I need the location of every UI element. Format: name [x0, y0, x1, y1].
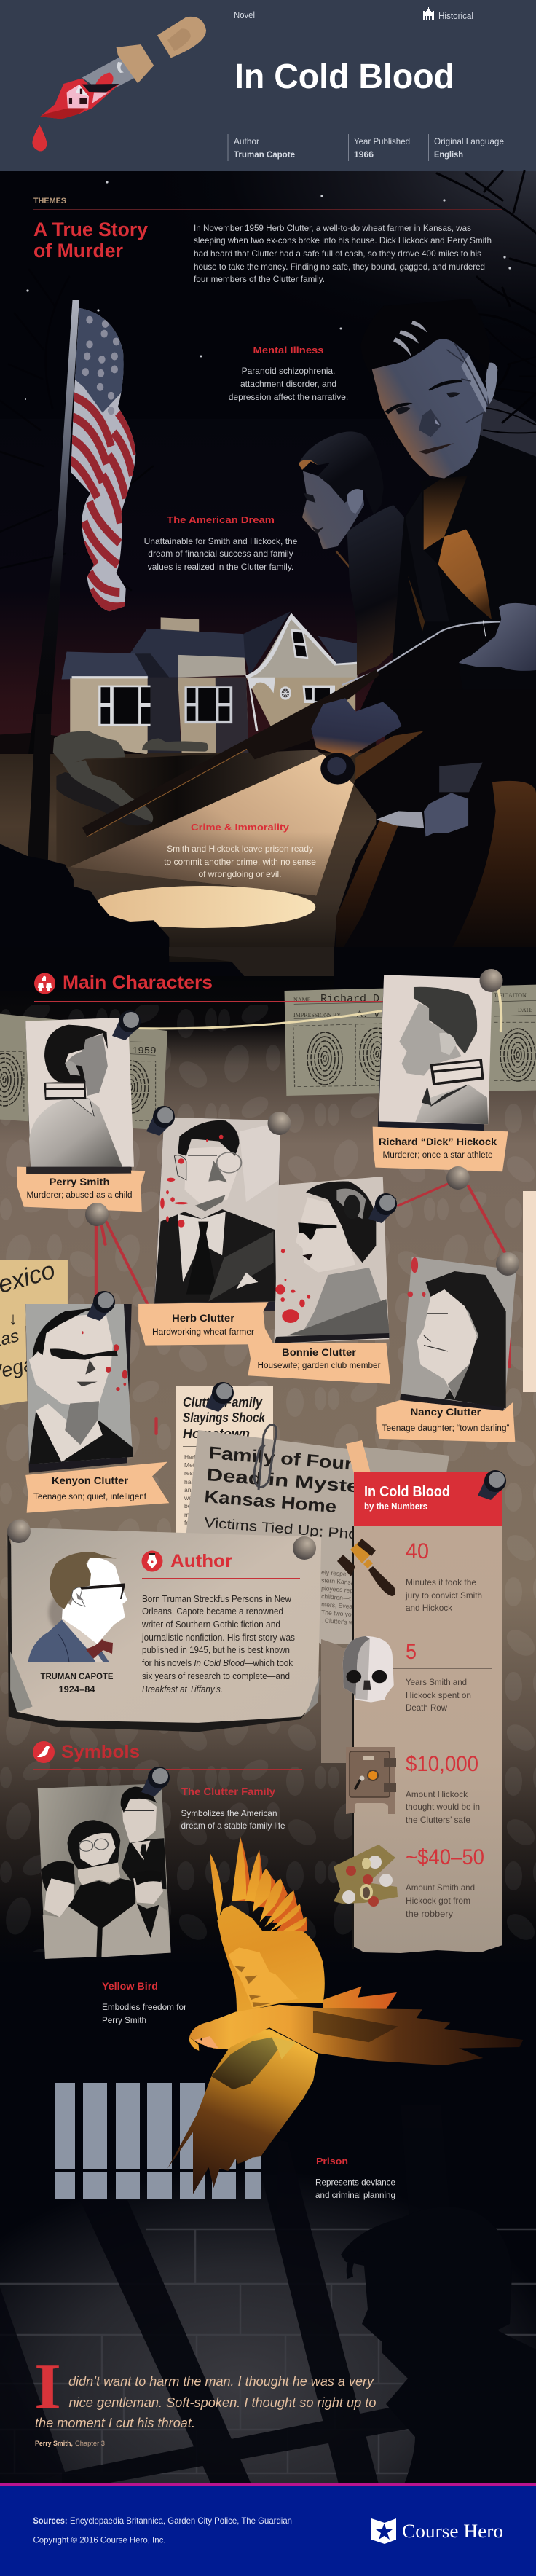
author biography: for his novels In Cold Blood—which took: [142, 1658, 293, 1668]
icon: dove: [33, 1741, 55, 1763]
foreground rock: [0, 844, 169, 962]
theme: crime and immorality: Smith and Hickock leave prison ready: [167, 844, 313, 854]
man front: face: [372, 339, 488, 479]
fingerprint cards: A. V.: [357, 1009, 385, 1020]
newspaper: family of four shot: [186, 1425, 449, 1763]
window shadow: [0, 2105, 473, 2484]
stat: 10000: the Clutters’ safe: [406, 1815, 470, 1825]
note: handwritten mexico: ↓: [9, 1309, 17, 1329]
newspaper: clutter family slayings: Herb: [184, 1453, 198, 1461]
ground bit below rock: [169, 947, 334, 978]
theme: american dream: values is realized in the Clutter family.: [148, 562, 293, 572]
label: richard hickock: [373, 1127, 508, 1171]
daughter: [43, 1907, 98, 1959]
panel: by the numbers: by the Numbers: [364, 1501, 427, 1512]
title: In Cold Blood: [234, 58, 454, 96]
stat: 10000: Amount Hickock: [406, 1789, 468, 1799]
theme: crime and immorality: [164, 822, 316, 879]
stat: 5: [393, 1640, 492, 1713]
icon: castle: [423, 7, 434, 20]
symbol: prison: Represents deviance: [315, 2177, 395, 2187]
icon: paperclip: [254, 1425, 277, 1490]
newspaper: family of four shot: Dead in Mystery: [206, 1465, 382, 1499]
newspaper: clutter family slayings: for: [184, 1519, 192, 1526]
right hand: [459, 603, 536, 671]
stat: 40: jury to convict Smith: [405, 1590, 482, 1601]
silhouette: perry smith: [341, 2207, 536, 2484]
symbol: yellow bird: [102, 1980, 186, 2025]
fingerprint cards: [0, 985, 536, 1131]
fingerprint cards: NAME: [293, 997, 311, 1003]
stat: 10000: thought would be in: [406, 1802, 480, 1812]
panel: themes night scene: [0, 171, 536, 1009]
theme heading: A True Story: [34, 219, 148, 240]
newspaper: clutter family slayings: Hometown: [183, 1426, 250, 1441]
newspaper: family of four shot: stern Kansas: [321, 1576, 358, 1586]
newspaper: family of four shot: children—t: [321, 1593, 352, 1602]
newspaper: clutter family slayings: mad: [184, 1511, 197, 1518]
theme: american dream: Unattainable for Smith and Hickock, the: [144, 536, 298, 546]
logo: [371, 2518, 503, 2544]
newspaper: clutter family slayings: and: [184, 1486, 194, 1493]
theme: american dream: [144, 514, 298, 572]
illustration: yard and flashlight beam: [0, 714, 376, 962]
meta: language: Original Language: [434, 136, 504, 146]
newspaper: family of four shot: nters, Evean: [321, 1601, 356, 1610]
tape: [346, 1440, 372, 1482]
newspaper: clutter family slayings: were: [184, 1494, 198, 1501]
theme summary: [194, 223, 492, 284]
stat: 5: Years Smith and: [406, 1677, 467, 1687]
footer: Encyclopaedia Britannica, Garden City Police, The Guardian: [70, 2516, 292, 2526]
label: nancy clutter: [376, 1400, 515, 1442]
author biography: six years of research to complete—and: [142, 1671, 290, 1681]
stat: 40-50: [393, 1845, 492, 1919]
wing coverts: [217, 1905, 325, 2012]
author caption: TRUMAN CAPOTE: [41, 1671, 114, 1681]
author biography: writer of Southern Gothic fiction and: [141, 1619, 280, 1630]
heading: symbols: Symbols: [61, 1742, 140, 1762]
meta: language: English: [434, 149, 463, 160]
symbol: clutter family: dream of a stable family life: [181, 1821, 285, 1831]
photo: richard hickock: [378, 975, 492, 1131]
stat: 40-50: ~$40–50: [406, 1845, 484, 1869]
newspaper: family of four shot: Kansas Home: [204, 1487, 337, 1517]
fingerprint cards: Richard D: [320, 993, 379, 1005]
symbol: clutter family: Symbolizes the American: [181, 1808, 277, 1818]
stars: [25, 181, 511, 400]
theme summary: four members of the Clutter family.: [194, 274, 325, 284]
lower wing: [168, 2029, 318, 2194]
head: [189, 2038, 199, 2051]
symbol: clutter family: The Clutter Family: [181, 1786, 275, 1797]
label: perry smith: Murderer; abused as a child: [26, 1191, 133, 1200]
mother: [67, 1820, 120, 1870]
photo: bonnie clutter: [274, 1177, 390, 1343]
theme: mental illness: Mental Illness: [253, 345, 323, 356]
genre label: Novel: [234, 9, 255, 20]
quote: didn’t want to harm the man. I thought he was a very: [68, 2374, 374, 2389]
label: kenyon clutter: [25, 1462, 169, 1513]
meta: author: Author: [234, 136, 259, 146]
panel: author card: [7, 1528, 321, 1732]
house: [61, 611, 359, 756]
meta: year: [348, 134, 410, 161]
fingerprint cards: IMPRESSIONS BY: [293, 1012, 341, 1018]
author biography: Orleans, Capote became a renowned: [142, 1606, 283, 1617]
theme: mental illness: [229, 345, 348, 402]
quote: [34, 2352, 376, 2448]
newspaper: family of four shot: Victims Tied Up; Photo: [204, 1515, 372, 1544]
newspaper: clutter family slayings: Meth: [184, 1461, 198, 1469]
newspaper: family of four shot: ely respe: [321, 1568, 347, 1577]
author biography: published in 1945, but he is best known: [142, 1645, 290, 1655]
upper tail: [323, 1987, 397, 2011]
son: [101, 1903, 171, 1957]
label: perry smith: [17, 1167, 145, 1212]
heading: main characters: Main Characters: [63, 973, 213, 993]
newspaper: clutter family slayings: resp: [184, 1469, 197, 1477]
gray shoulder backdrop: [466, 393, 536, 466]
beam of flashlight: [70, 754, 354, 895]
label: bonnie clutter: Bonnie Clutter: [282, 1346, 357, 1358]
prison window: [55, 2083, 261, 2199]
heading: main characters: [34, 973, 384, 1002]
theme: crime and immorality: to commit another crime, with no sense: [164, 857, 316, 867]
illustration: flag and house: [0, 300, 376, 770]
left hand: [311, 698, 402, 758]
legs: [334, 690, 536, 962]
note: handwritten mexico: [0, 1256, 68, 1405]
horizon hills: [0, 733, 376, 770]
photo: perry smith: [25, 1018, 134, 1174]
paper edge: [523, 1191, 536, 1392]
icon: skull: [343, 1636, 394, 1703]
symbol: yellow bird: Perry Smith: [102, 2015, 146, 2025]
primary feathers: [210, 1837, 307, 1936]
theme heading: of Murder: [34, 240, 123, 262]
man behind: coat: [299, 299, 536, 734]
subgenre label: Historical: [438, 10, 473, 21]
man front: body: [386, 435, 536, 734]
man front: hair: [360, 299, 490, 374]
stat: 5: Hickock spent on: [406, 1690, 471, 1700]
fingerprint cards: 1959: [132, 1045, 157, 1057]
meta: author: [227, 134, 295, 161]
trees: [0, 171, 536, 590]
panel: by the numbers: In Cold Blood: [364, 1484, 450, 1500]
logo: Course Hero: [402, 2521, 503, 2542]
symbol: prison: [315, 2156, 395, 2200]
author biography: journalistic nonfiction. His first story was: [141, 1633, 295, 1643]
symbol: prison: Prison: [316, 2156, 348, 2167]
sources: Sources:: [34, 2516, 67, 2526]
fingerprint cards: TIFICAITON: [494, 992, 527, 999]
icon: cash: [334, 1845, 398, 1907]
theme summary: house to take the money. Finding no safe, they bound, gagged, and murdered: [194, 262, 485, 272]
photo: herb clutter: [154, 1117, 280, 1311]
gun barrel: [82, 669, 379, 836]
symbol: yellow bird: Embodies freedom for: [102, 2002, 186, 2012]
copyright: Copyright © 2016 Course Hero, Inc.: [34, 2535, 166, 2545]
meta: language: [428, 134, 504, 161]
men figures: [82, 299, 536, 962]
stat: 40-50: Hickock got from: [406, 1896, 470, 1906]
label: nancy clutter: Nancy Clutter: [411, 1406, 481, 1418]
panel: by the numbers: [352, 1472, 502, 1953]
quote: the moment I cut his throat.: [35, 2416, 195, 2430]
theme summary: had heard that Clutter had a safe full of cash, so they drove 400 miles to his: [194, 248, 481, 259]
bushes: [53, 731, 208, 825]
icon: dropper with house and blood: [32, 17, 206, 151]
bird: [168, 1837, 523, 2194]
trigger guard: [320, 753, 355, 785]
header panel: [0, 0, 536, 171]
theme: mental illness: Paranoid schizophrenia,: [242, 366, 335, 376]
meta: year: 1966: [354, 149, 374, 160]
stat: 40: [372, 1539, 492, 1613]
stock of shotgun: [350, 621, 500, 734]
author caption: 1924–84: [58, 1684, 95, 1695]
body and tail: [189, 2005, 523, 2065]
author caption: [41, 1671, 114, 1695]
icon: pen nib: [141, 1550, 163, 1572]
newspaper: clutter family slayings: bein: [184, 1502, 196, 1509]
red feather backs: [235, 1837, 307, 1938]
newspaper: clutter family slayings: Clutter Family: [183, 1395, 263, 1410]
label: perry smith: Perry Smith: [50, 1176, 109, 1187]
label: kenyon clutter: Teenage son; quiet, intelligent: [34, 1493, 147, 1501]
author biography: [141, 1594, 295, 1695]
theme summary: In November 1959 Herb Clutter, a well-to-do wheat farmer in Kansas, was: [194, 223, 471, 233]
stat: 40: and Hickock: [406, 1603, 453, 1613]
newspaper: family of four shot: . Clutter's w: [321, 1617, 354, 1626]
quote attribution: [35, 2440, 105, 2448]
meta: author: Truman Capote: [234, 149, 295, 160]
section label: THEMES: [34, 197, 66, 205]
theme: mental illness: depression affect the narrative.: [229, 392, 348, 402]
stat: 40: 40: [406, 1539, 429, 1563]
knife: [376, 811, 424, 828]
knife hand: [424, 793, 468, 836]
label: herb clutter: Hardworking wheat farmer: [152, 1328, 254, 1337]
label: richard hickock: Richard “Dick” Hickock: [379, 1136, 497, 1147]
theme: american dream: The American Dream: [167, 514, 275, 525]
bottom dark panel: [0, 1962, 536, 2486]
quote: nice gentleman. Soft-spoken. I thought so right up to: [68, 2395, 376, 2410]
photo: kenyon clutter: [25, 1304, 133, 1473]
stat: 10000: $10,000: [406, 1752, 478, 1776]
flag pole: [28, 300, 79, 762]
stat: 40-50: Amount Smith and: [406, 1882, 475, 1893]
brick wall: [0, 2229, 536, 2473]
label: kenyon clutter: Kenyon Clutter: [52, 1474, 129, 1486]
symbol: yellow bird: Yellow Bird: [102, 1980, 158, 1992]
heading: symbols: [33, 1741, 302, 1770]
theme: mental illness: attachment disorder, and: [240, 379, 336, 389]
stat: 40: Minutes it took the: [406, 1577, 476, 1587]
newspaper: clutter family slayings: had: [184, 1478, 194, 1485]
pole base: [28, 714, 51, 865]
drop cap: I: [34, 2352, 61, 2422]
stat: 5: Death Row: [406, 1703, 447, 1713]
footer: [0, 2483, 536, 2576]
panel: corkboard background: [0, 947, 536, 1967]
author biography: Born Truman Streckfus Persons in New: [142, 1594, 292, 1604]
label: bonnie clutter: Housewife; garden club member: [258, 1362, 381, 1370]
icon: safe: [346, 1747, 396, 1814]
stat: 5: 5: [406, 1640, 417, 1664]
stat: 40-50: the robbery: [406, 1909, 453, 1919]
red and cream strings: [96, 989, 509, 1434]
symbol: prison: and criminal planning: [315, 2190, 395, 2200]
label: bonnie clutter: [248, 1343, 390, 1384]
author biography: Breakfast at Tiffany’s.: [142, 1684, 223, 1695]
icon: people: [34, 973, 55, 994]
theme summary: sleeping when two ex-cons broke into his house. Dick Hickock and Perry Smith: [194, 235, 492, 246]
symbol: clutter family: [181, 1786, 285, 1831]
newspaper: family of four shot: Family of Four Shot: [208, 1443, 406, 1478]
fingerprint cards: DATE: [518, 1007, 533, 1013]
gray backdrop branches: [483, 328, 536, 433]
icon: gavel: [337, 1539, 395, 1596]
stat: 10000: [395, 1752, 492, 1825]
photo: nancy clutter: [400, 1257, 516, 1411]
theme: american dream: dream of financial success and family: [148, 549, 293, 559]
american flag: [71, 308, 135, 612]
panel: author card: Author: [170, 1551, 232, 1571]
theme: crime and immorality: of wrongdoing or evil.: [198, 869, 282, 879]
label: nancy clutter: Teenage daughter; “town darling”: [382, 1424, 510, 1433]
newspaper: clutter family slayings: [176, 1386, 273, 1560]
meta: year: Year Published: [354, 136, 410, 146]
ground: [0, 753, 376, 962]
quote attribution: Chapter 3: [75, 2440, 105, 2448]
father: [122, 1838, 167, 1889]
theme heading: [34, 219, 148, 262]
quote attribution: Perry Smith,: [35, 2440, 73, 2448]
pins: [7, 969, 519, 1560]
newspaper: family of four shot: The two you: [321, 1609, 355, 1618]
label: herb clutter: Herb Clutter: [172, 1312, 235, 1324]
photo: clutter family: [38, 1767, 171, 1959]
newspaper: clutter family slayings: Slayings Shock: [183, 1410, 266, 1425]
portrait: truman capote: [28, 1552, 127, 1662]
theme: crime and immorality: Crime & Immorality: [191, 822, 290, 833]
label: herb clutter: [138, 1302, 274, 1346]
label: richard hickock: Murderer; once a star athlete: [383, 1151, 492, 1160]
newspaper: family of four shot: ployees repo: [321, 1585, 357, 1594]
